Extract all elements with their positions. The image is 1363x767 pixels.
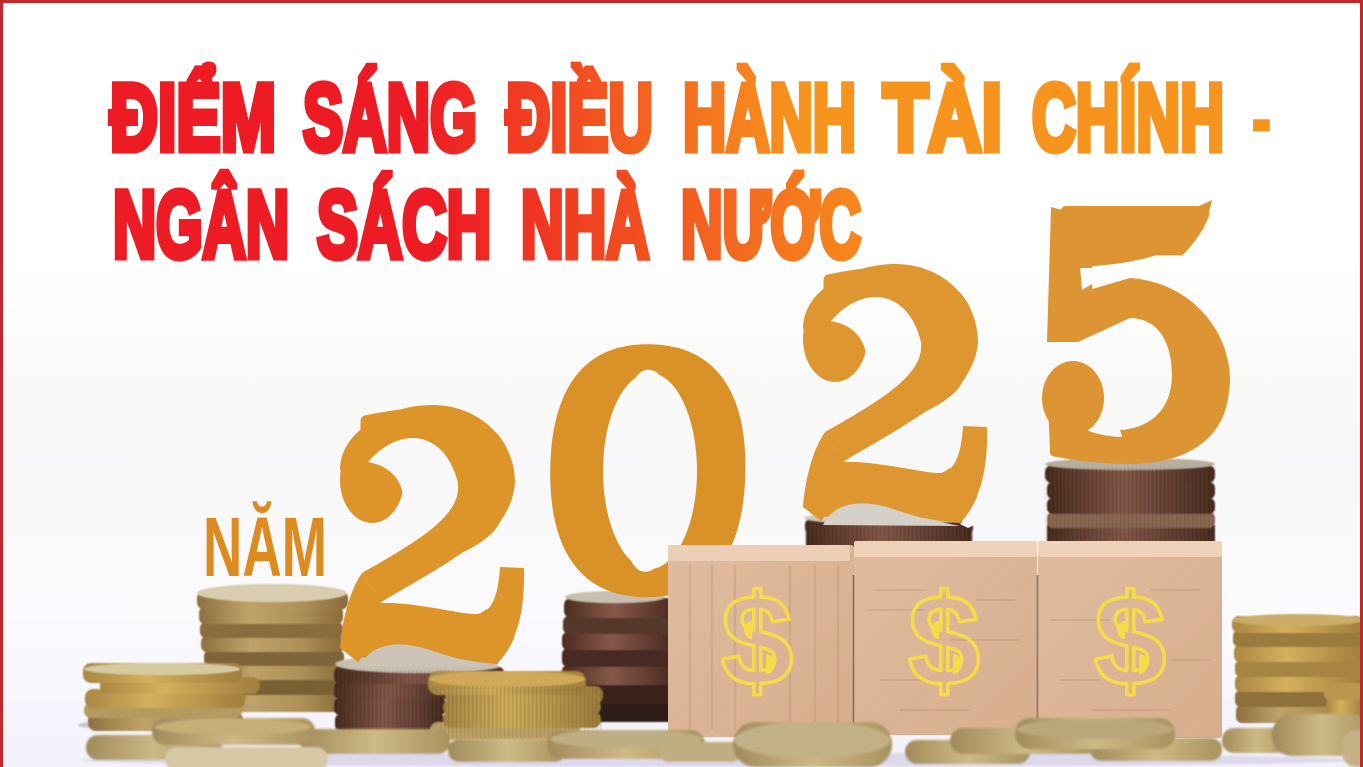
title line 1 (110, 65, 1272, 171)
block 1 (668, 545, 854, 737)
digit 2: 2 (337, 329, 530, 734)
title (110, 65, 1272, 278)
coin stack: brown under digit 2 (334, 655, 505, 731)
title line 2: NGÂN (113, 171, 289, 278)
title line 2: NHÀ (521, 172, 649, 278)
title line 2: NƯỚC (681, 172, 861, 278)
big number 2025 (330, 121, 1245, 734)
digit 5: 5 (1036, 121, 1239, 537)
block 3 (1038, 541, 1222, 738)
label: NĂM: NĂM (203, 500, 327, 594)
dollar sign: $ (721, 567, 793, 713)
digit 0: 0 (535, 265, 761, 671)
title line 1: TÀI (883, 65, 1002, 171)
title line 1: CHÍNH (1032, 65, 1224, 171)
coin stack: brown under second digit 2 (804, 512, 973, 548)
title line 1: HÀNH (683, 65, 856, 171)
title line 1: - (1251, 65, 1272, 171)
title line 1: ĐIỂM (110, 65, 276, 171)
coin stack: tall gold behind digit 2 (197, 584, 348, 712)
block 2 (854, 541, 1037, 735)
wooden blocks with dollar signs (668, 541, 1222, 738)
coin stack: gold at right (1232, 614, 1363, 723)
title line 2: SÁCH (317, 172, 491, 278)
title line 1: SÁNG (303, 65, 477, 171)
coin stack: brown under digit 0 (562, 591, 676, 722)
loose coins on the table (80, 714, 1363, 767)
coin stack: gold in front (428, 671, 603, 740)
title line 2 (113, 171, 861, 278)
coin stack: small gold at left (78, 663, 260, 731)
coin stack: brown under digit 5 (1045, 458, 1215, 546)
title line 1: ĐIỀU (506, 65, 653, 171)
dollar sign: $ (908, 567, 980, 713)
dollar sign: $ (1094, 567, 1166, 713)
digit 2: 2 (800, 188, 993, 593)
